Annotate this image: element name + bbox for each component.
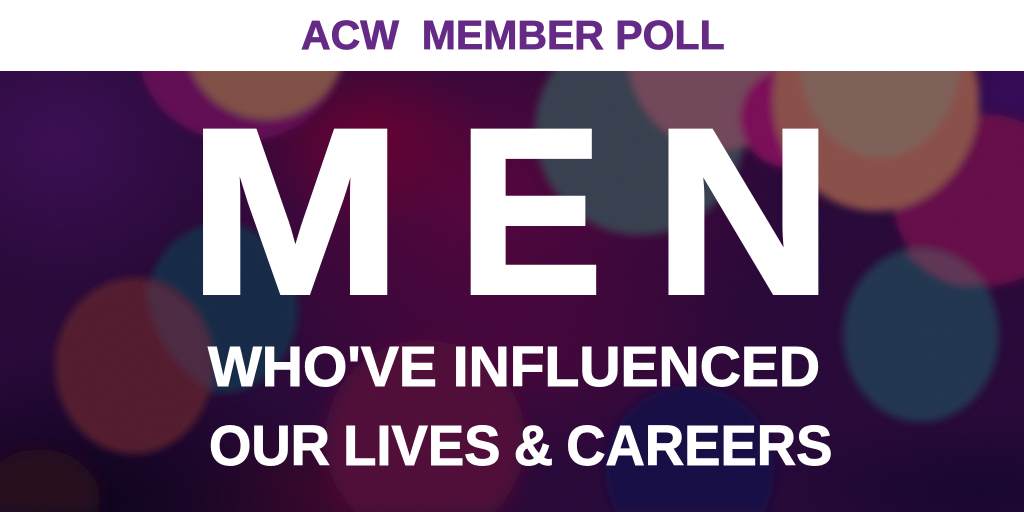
letter E: E bbox=[458, 80, 603, 344]
subtitle line 2: OUR LIVES & CAREERS bbox=[209, 414, 832, 478]
title: MEN bbox=[188, 80, 833, 344]
subtitle line 1: WHO'VE INFLUENCED bbox=[208, 335, 820, 399]
heading: ACW member poll: ACW MEMBER POLL bbox=[301, 12, 725, 58]
header band bbox=[0, 0, 1024, 71]
letter M: M bbox=[188, 80, 402, 344]
letter N: N bbox=[654, 80, 833, 344]
